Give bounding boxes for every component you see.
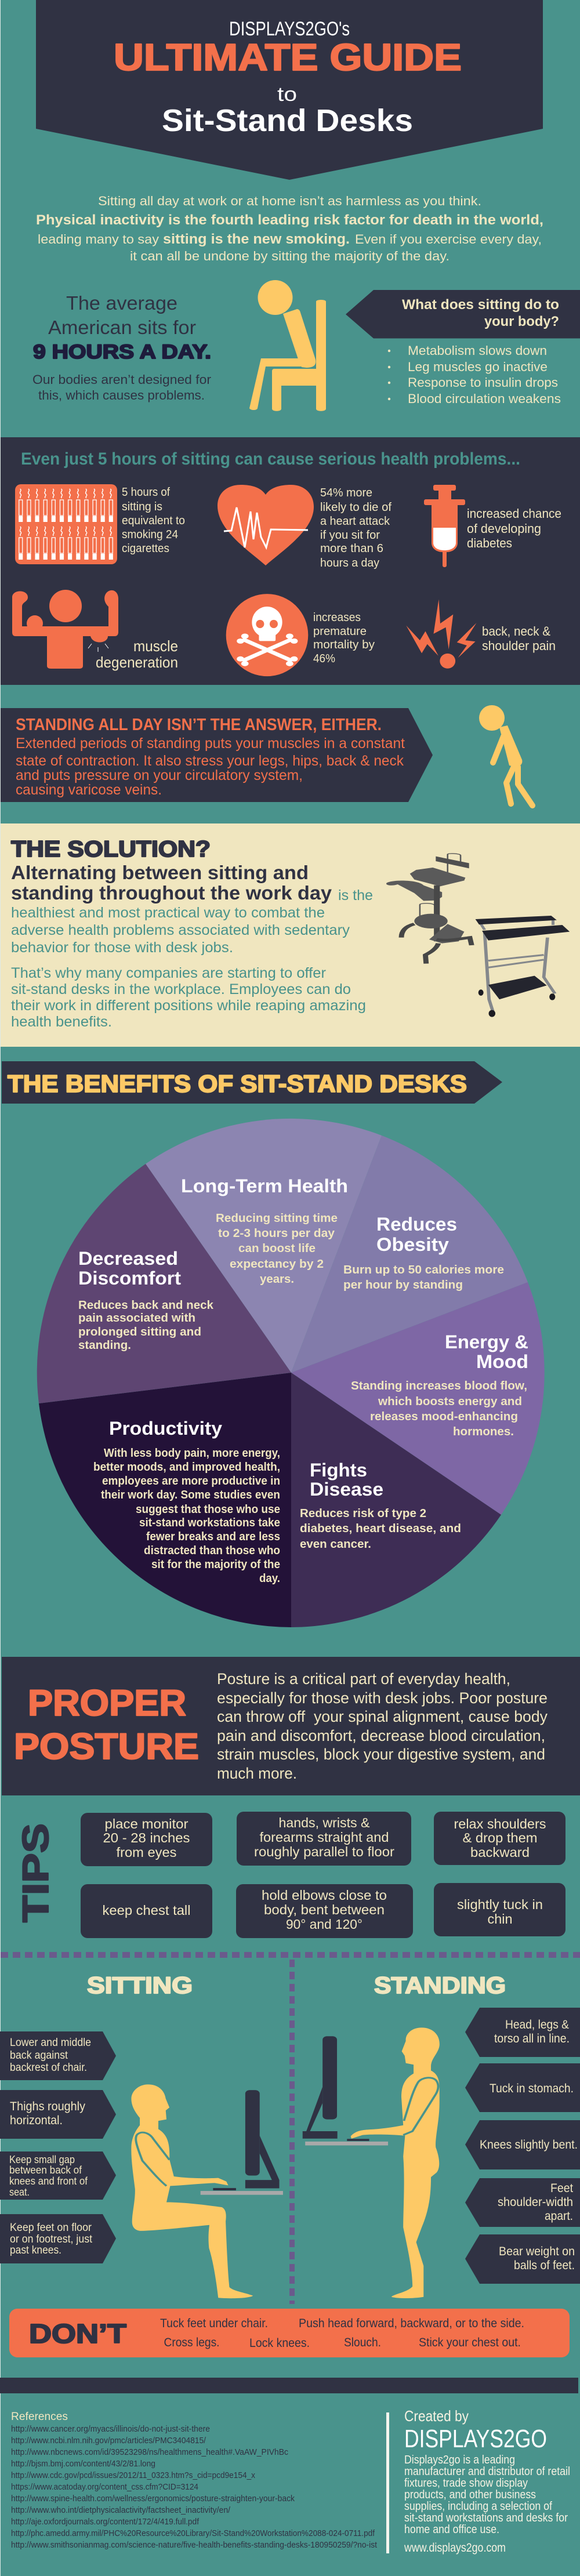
tag: head legs torso: [465, 2008, 580, 2057]
intro text: sitting is the new smoking.: [163, 231, 350, 247]
text: don't list: Push head forward, backward, or to the side.: [299, 2317, 524, 2330]
text: muscle degeneration: muscle: [133, 637, 178, 655]
slice: productivity: day.: [259, 1572, 280, 1585]
illustration: standing posture: [303, 2027, 440, 2298]
text: average american sits 9 hours: [32, 292, 211, 402]
slice: productivity: suggest that those who use: [136, 1503, 280, 1516]
tip: tuck in chin: slightly tuck in: [457, 1897, 543, 1912]
tip: hold elbows: hold elbows close to: [262, 1888, 387, 1903]
text: cigarettes stat: [122, 486, 185, 555]
slice: long-term health: Reducing sitting time: [216, 1212, 338, 1225]
credits: [404, 2407, 570, 2555]
banner: benefits heading: [2, 1061, 502, 1104]
tag: feet width: [465, 2178, 580, 2227]
tag: lower back: [0, 2031, 116, 2080]
tag: lower back: backrest of chair.: [10, 2062, 87, 2074]
credits: DISPLAYS2GO: [404, 2425, 547, 2453]
tip: place monitor: [81, 1813, 212, 1866]
icon: slouching standing figure: [479, 705, 532, 806]
tag: thighs: Thighs roughly: [10, 2100, 85, 2113]
tip: place monitor: 20 - 28 inches: [103, 1830, 190, 1845]
intro text: it can all be undone by sitting the majority of the day.: [130, 249, 449, 263]
text: alternating: healthiest and most practical way to combat the: [11, 905, 325, 921]
heading: proper posture: POSTURE: [14, 1726, 199, 1767]
text: alternating: is the: [338, 887, 373, 904]
tag: knees bent: [465, 2120, 580, 2169]
panel: proper posture: [2, 1657, 580, 1795]
text: posture description: strain muscles, block your digestive system, and: [217, 1746, 545, 1763]
tag: knee gap: Keep small gap: [9, 2154, 75, 2165]
intro text: Sitting all day at work or at home isn’t as harmless as you think.: [98, 194, 481, 208]
slice: energy and mood: releases mood-enhancing: [370, 1410, 518, 1423]
text: heart stat: hours a day: [320, 557, 379, 569]
text: posture description: Posture is a critical part of everyday health,: [217, 1670, 510, 1688]
slice: fights disease: Disease: [310, 1479, 383, 1500]
icon: mobile workstation: [386, 854, 472, 964]
slice: energy and mood: Mood: [476, 1351, 528, 1372]
text: companies offering desks: sit-stand desks in the workplace. Employees can do: [11, 981, 351, 997]
slice: energy and mood: which boosts energy and: [378, 1395, 522, 1408]
tip: relax shoulders: [434, 1812, 566, 1865]
illustration: seated posture: [131, 2084, 283, 2298]
intro text: Even if you exercise every day,: [355, 232, 542, 246]
text: alternating: adverse health problems associated with sedentary: [11, 922, 350, 938]
panel: don't: [9, 2309, 570, 2357]
slice: reduces obesity: Burn up to 50 calories more: [343, 1264, 504, 1276]
slice: fights disease: Reduces risk of type 2: [300, 1507, 426, 1520]
tip: keep chest tall: keep chest tall: [102, 1903, 190, 1918]
callout: what does sitting do: What does sitting do to: [402, 297, 559, 313]
slice: energy and mood: [291, 1282, 545, 1515]
banner: standing all day: Extended periods of standing puts your muscles in a constant: [16, 735, 405, 752]
heading: tips vertical: TIPS: [16, 1823, 56, 1922]
slice: long-term health: [146, 1119, 382, 1373]
heading: the solution: THE SOLUTION?: [11, 837, 211, 862]
banner: benefits heading: THE BENEFITS OF SIT-STAND DESKS: [8, 1070, 467, 1097]
text: heart stat: [320, 487, 392, 569]
text: average american sits 9 hours: 9 HOURS A DAY.: [33, 341, 211, 363]
tag: feet on floor: or on footrest, just: [10, 2233, 93, 2245]
text: posture description: especially for those with desk jobs. Poor posture: [217, 1689, 548, 1707]
text: alternating: [11, 862, 373, 956]
text: heart stat: if you sit for: [320, 529, 380, 542]
icon: skull and crossbones: [226, 594, 308, 676]
tag: thighs: horizontal.: [10, 2114, 63, 2127]
text: diabetes stat: diabetes: [467, 536, 512, 550]
tag: feet on floor: Keep feet on floor: [10, 2222, 92, 2234]
heading: standing: STANDING: [374, 1973, 506, 1998]
text: posture description: pain and discomfort, decrease blood circulation,: [217, 1727, 545, 1744]
header banner: [36, 0, 543, 180]
intro text: Physical inactivity is the fourth leading risk factor for death in the world,: [36, 212, 543, 228]
text: don't list: Stick your chest out.: [419, 2336, 521, 2349]
tag: bear weight: [465, 2234, 580, 2284]
tag: feet width: apart.: [545, 2209, 573, 2223]
references: http://www.who.int/dietphysicalactivity/factsheet_inactivity/en/: [11, 2505, 231, 2515]
references: [11, 2411, 378, 2550]
text: cigarettes stat: sitting is: [122, 500, 162, 513]
text: average american sits 9 hours: The average: [66, 292, 177, 314]
text: alternating: Alternating between sitting and: [11, 862, 309, 883]
title: to: to: [277, 84, 297, 106]
text: posture description: much more.: [217, 1765, 297, 1782]
tip: hold elbows: 90° and 120°: [286, 1917, 362, 1932]
text: back neck shoulder pain: shoulder pain: [482, 638, 556, 653]
credits: Created by: [404, 2407, 469, 2425]
icon: standing desk cart: [476, 916, 570, 1017]
slice: productivity: sit for the majority of the: [151, 1558, 280, 1571]
tip: hands wrists forearms: forearms straight and: [260, 1830, 389, 1845]
brand name: DISPLAYS2GO's: [229, 18, 350, 40]
tag: tuck stomach: Tuck in stomach.: [490, 2082, 574, 2095]
banner: standing all day: STANDING ALL DAY ISN’T THE ANSWER, EITHER.: [16, 716, 382, 734]
banner: standing all day: [1, 708, 433, 802]
tip: relax shoulders: backward: [470, 1845, 530, 1860]
heading: proper posture: [14, 1683, 199, 1767]
text: companies offering desks: their work in different positions while reaping amazing: [11, 997, 366, 1014]
text: posture description: [217, 1670, 548, 1782]
tip: hands wrists forearms: [237, 1812, 411, 1866]
credits: www.displays2go.com: [404, 2541, 506, 2555]
references: http://www.cdc.gov/pcd/issues/2012/11_0323.htm?s_cid=pcd9e154_x: [11, 2470, 255, 2480]
icon: pain bolts: [406, 600, 476, 669]
text: alternating: standing throughout the work day: [11, 882, 332, 904]
icon: cigarettes: [15, 484, 117, 564]
tip: hold elbows: [236, 1884, 413, 1938]
banner: standing all day: causing varicose veins.: [16, 782, 162, 798]
text: muscle degeneration: degeneration: [96, 654, 178, 671]
banner: standing all day: and puts pressure on your circulatory system,: [16, 767, 303, 783]
tag: feet width: Feet: [550, 2182, 573, 2195]
tag: feet on floor: past knees.: [10, 2244, 61, 2256]
slice: reduces obesity: Obesity: [376, 1234, 449, 1255]
references: http://www.nbcnews.com/id/39523298/ns/healthmens_health#.VaAW_PIVhBc: [11, 2447, 288, 2457]
tag: bear weight: balls of feet.: [514, 2259, 575, 2272]
callout: what does sitting do: your body?: [484, 314, 559, 329]
tag: tuck stomach: [465, 2063, 580, 2112]
references: http://aje.oxfordjournals.org/content/172/4/419.full.pdf: [11, 2517, 200, 2527]
slice: decreased discomfort: Discomfort: [78, 1268, 181, 1289]
slice: long-term health: expectancy by 2: [230, 1258, 324, 1271]
text: muscle degeneration: [96, 637, 178, 671]
references: http://www.spine-health.com/wellness/ergonomics/posture-straighten-your-back: [11, 2494, 295, 2504]
intro text: [36, 194, 543, 263]
heading: don't: DON’T: [29, 2319, 126, 2349]
references: References: [11, 2411, 68, 2423]
slice: productivity: sit-stand workstations take: [139, 1516, 280, 1529]
text: premature mortality stat: 46%: [313, 652, 335, 665]
tag: thighs: [0, 2090, 116, 2139]
slice: decreased discomfort: standing.: [78, 1339, 131, 1352]
text: posture description: can throw off your spinal alignment, cause body: [217, 1708, 548, 1725]
text: average american sits 9 hours: this, which causes problems.: [38, 388, 205, 402]
text: cigarettes stat: cigarettes: [122, 542, 169, 555]
tag: head legs torso: torso all in line.: [494, 2032, 570, 2045]
heading: sitting: SITTING: [87, 1973, 193, 1998]
tag: knee gap: between back of: [9, 2164, 82, 2176]
panel: health problems: [1, 437, 580, 685]
text: companies offering desks: [11, 965, 366, 1030]
credits: supplies, including a selection of: [404, 2500, 552, 2513]
text: diabetes stat: of developing: [467, 521, 541, 536]
intro text: leading many to say: [38, 232, 159, 246]
tag: knee gap: seat.: [9, 2186, 30, 2198]
slice: long-term health: Long-Term Health: [181, 1175, 348, 1196]
slice: productivity: fewer breaks and are less: [146, 1530, 280, 1543]
icon: heart with pulse: [217, 485, 314, 565]
credits: home and office use.: [404, 2523, 499, 2536]
tip: relax shoulders: & drop them: [463, 1830, 537, 1845]
slice: productivity: their work day. Some studies even: [101, 1489, 280, 1501]
title: ultimate guide: ULTIMATE GUIDE: [114, 36, 462, 78]
slice: fights disease: Fights: [310, 1460, 367, 1481]
tag: head legs torso: Head, legs &: [505, 2018, 569, 2031]
icon: flexing figure: [12, 590, 118, 669]
slice: energy and mood: Standing increases blood flow,: [351, 1380, 527, 1392]
heading: proper posture: PROPER: [28, 1683, 186, 1724]
slice: energy and mood: Energy &: [445, 1331, 528, 1352]
slice: productivity: better moods, and improved health,: [93, 1461, 280, 1474]
slice: fights disease: even cancer.: [300, 1538, 371, 1551]
text: premature mortality stat: [313, 611, 375, 665]
tag: knee gap: [0, 2151, 116, 2200]
slice: productivity: With less body pain, more energy,: [104, 1447, 280, 1460]
text: average american sits 9 hours: American sits for: [48, 317, 196, 338]
tip: tuck in chin: chin: [487, 1911, 513, 1926]
tip: tuck in chin: [434, 1883, 566, 1936]
banner: standing all day: state of contraction. It also stress your legs, hips, back & neck: [16, 753, 404, 769]
tip: relax shoulders: relax shoulders: [454, 1816, 546, 1831]
callout: what does sitting do: [346, 290, 580, 339]
slice: decreased discomfort: Reduces back and neck: [78, 1299, 214, 1312]
text: premature mortality stat: premature: [313, 625, 367, 638]
tip: keep chest tall: [81, 1884, 212, 1938]
text: alternating: behavior for those with desk jobs.: [11, 939, 233, 956]
tip: hands wrists forearms: roughly parallel to floor: [254, 1844, 394, 1859]
tip: hold elbows: body, bent between: [264, 1902, 385, 1917]
slice: energy and mood: hormones.: [453, 1425, 514, 1438]
references: http://phc.amedd.army.mil/PHC%20Resource%20Library/Sit-Stand%20Workstation%2088-024-0711.pdf: [11, 2528, 375, 2538]
slice: decreased discomfort: prolonged sitting and: [78, 1326, 201, 1338]
tip: place monitor: place monitor: [104, 1816, 188, 1831]
text: heart stat: likely to die of: [320, 501, 392, 514]
slice: decreased discomfort: pain associated with: [78, 1312, 195, 1325]
text: companies offering desks: health benefits.: [11, 1014, 112, 1030]
text: don't list: [160, 2317, 524, 2350]
text: cigarettes stat: equivalent to: [122, 514, 185, 527]
credits: Displays2go is a leading: [404, 2454, 515, 2466]
text: don't list: Lock knees.: [249, 2336, 310, 2350]
text: diabetes stat: increased chance: [467, 506, 561, 521]
tag: bear weight: Bear weight on: [499, 2245, 575, 2258]
references: http://www.smithsonianmag.com/science-nature/five-health-benefits-standing-desks-180950259/?no-ist: [11, 2540, 378, 2550]
slice: decreased discomfort: [37, 1164, 291, 1403]
slice: productivity: employees are more productive in: [102, 1475, 280, 1487]
text: premature mortality stat: mortality by: [313, 638, 375, 651]
icon: syringe: [424, 485, 465, 567]
credits: products, and other business: [404, 2488, 536, 2501]
references: http://bjsm.bmj.com/content/43/2/81.long: [11, 2459, 155, 2469]
slice: reduces obesity: per hour by standing: [343, 1279, 463, 1291]
text: back neck shoulder pain: back, neck &: [482, 624, 550, 638]
slice: long-term health: years.: [260, 1273, 294, 1286]
slice: long-term health: to 2-3 hours per day: [218, 1227, 335, 1240]
text: heart stat: 54% more: [320, 487, 372, 499]
text: companies offering desks: That’s why many companies are starting to offer: [11, 965, 326, 981]
heading: health problems: Even just 5 hours of sitting can cause serious health problems...: [21, 449, 520, 469]
slice: long-term health: can boost life: [238, 1242, 316, 1255]
panel: the solution: [1, 823, 580, 1047]
references: http://www.ncbi.nlm.nih.gov/pmc/articles/PMC3404815/: [11, 2436, 206, 2446]
slice: reduces obesity: [291, 1135, 528, 1373]
slice: fights disease: [291, 1373, 501, 1627]
references: http://www.cancer.org/myacs/illinois/do-not-just-sit-there: [11, 2424, 210, 2434]
tip: hands wrists forearms: hands, wrists &: [278, 1815, 370, 1830]
text: average american sits 9 hours: Our bodies aren’t designed for: [32, 372, 211, 387]
text: cigarettes stat: smoking 24: [122, 528, 178, 541]
text: heart stat: a heart attack: [320, 515, 390, 528]
list: effects of sitting: Metabolism slows down: [408, 343, 547, 358]
list: effects of sitting: Response to insulin drops: [408, 375, 558, 390]
tag: knee gap: knees and front of: [9, 2175, 88, 2187]
text: don't list: Cross legs.: [164, 2336, 219, 2349]
tag: lower back: Lower and middle: [10, 2037, 91, 2049]
slice: reduces obesity: Reduces: [376, 1214, 457, 1235]
text: back neck shoulder pain: [482, 624, 556, 653]
icon: seated person on chair: [249, 280, 326, 411]
pie chart: benefits: [37, 1119, 545, 1627]
list: effects of sitting: [388, 343, 561, 406]
slice: decreased discomfort: Decreased: [78, 1248, 178, 1269]
list: effects of sitting: Leg muscles go inactive: [408, 360, 548, 374]
slice: productivity: distracted than those who: [144, 1544, 280, 1557]
text: cigarettes stat: 5 hours of: [122, 486, 170, 499]
slice: productivity: Productivity: [109, 1418, 222, 1439]
credits: fixtures, trade show display: [404, 2477, 528, 2490]
list: effects of sitting: Blood circulation weakens: [408, 391, 561, 406]
slice: productivity: [39, 1373, 291, 1627]
text: diabetes stat: [467, 506, 561, 550]
tag: lower back: back against: [10, 2049, 68, 2062]
slice: fights disease: diabetes, heart disease, and: [300, 1522, 461, 1535]
text: heart stat: more than 6: [320, 542, 383, 555]
title: sit-stand desks: Sit-Stand Desks: [162, 103, 413, 138]
text: premature mortality stat: increases: [313, 611, 361, 624]
tip: place monitor: from eyes: [116, 1845, 176, 1860]
text: don't list: Tuck feet under chair.: [160, 2317, 268, 2330]
tag: feet on floor: [0, 2214, 116, 2263]
tag: feet width: shoulder-width: [498, 2196, 573, 2209]
references: https://www.acatoday.org/content_css.cfm?CID=3124: [11, 2482, 198, 2492]
text: don't list: Slouch.: [344, 2336, 381, 2349]
